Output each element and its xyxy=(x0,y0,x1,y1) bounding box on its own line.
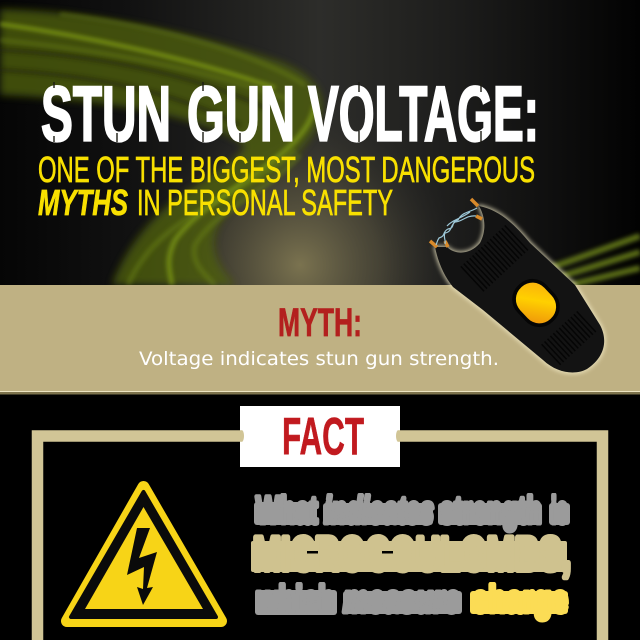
myth statement: Voltage indicates stun gun strength. xyxy=(139,348,499,370)
line: what indicates strength is xyxy=(254,490,570,532)
title xyxy=(41,70,539,158)
line: what indicates strength is: What xyxy=(256,490,318,532)
title: STUN xyxy=(41,70,171,158)
line: which measure: which xyxy=(256,579,335,621)
lightning bolt xyxy=(127,528,157,605)
line: charge: charge xyxy=(472,579,568,621)
electric arc xyxy=(436,208,477,245)
icon: high voltage warning xyxy=(67,487,221,621)
fact label: FACT xyxy=(282,408,364,466)
panel: myth xyxy=(0,285,640,394)
prongs xyxy=(430,199,482,247)
line: what indicates strength is: indicates xyxy=(324,490,434,532)
subtitle: IN PERSONAL SAFETY xyxy=(137,182,393,223)
line: which measure xyxy=(255,579,462,621)
subtitle: MYTHS xyxy=(38,182,128,223)
line: what indicates strength is: is xyxy=(551,490,568,532)
myth heading: MYTH: xyxy=(278,301,362,345)
header background xyxy=(0,0,640,285)
fact frame xyxy=(38,430,602,640)
line: which measure: measure xyxy=(343,579,460,621)
fact label xyxy=(240,406,400,467)
icon: stun gun xyxy=(430,199,604,372)
ribs xyxy=(461,225,600,369)
title: GUN xyxy=(187,70,295,158)
subtitle xyxy=(38,149,535,223)
green light streaks xyxy=(0,9,640,285)
button xyxy=(504,271,568,335)
fact statement xyxy=(251,490,571,621)
line: what indicates strength is: strength xyxy=(440,490,542,532)
